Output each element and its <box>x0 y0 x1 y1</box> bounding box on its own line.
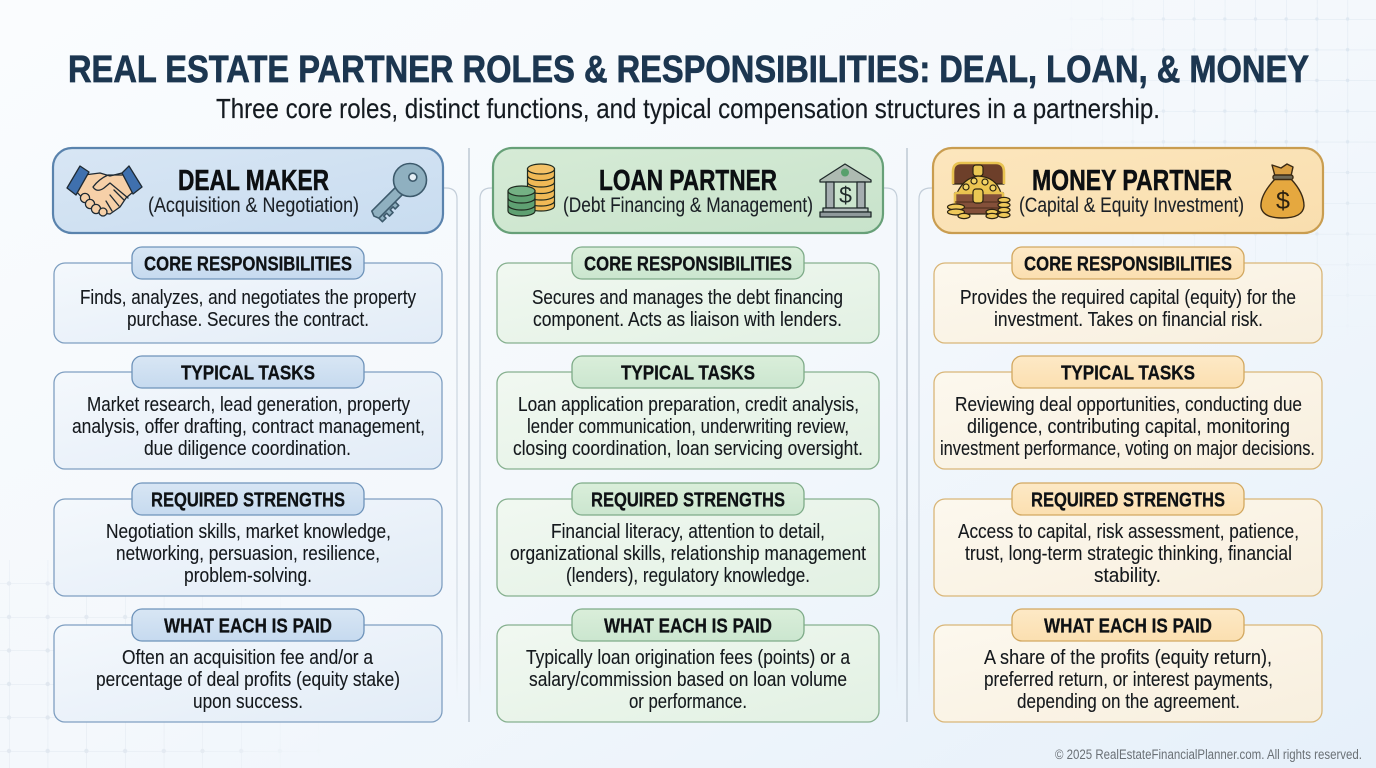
body text: Typically loan origination fees (points) or a <box>526 646 850 669</box>
body text: purchase. Secures the contract. <box>127 308 369 331</box>
body text: closing coordination, loan servicing oversight. <box>513 437 863 460</box>
pill label: CORE RESPONSIBILITIES <box>584 252 792 276</box>
card: core responsibilities <box>54 247 442 343</box>
card: core responsibilities <box>934 247 1322 343</box>
icon: treasure chest <box>948 163 1010 219</box>
card: what each is paid <box>497 609 879 722</box>
body text <box>984 646 1273 713</box>
card: core responsibilities <box>497 247 879 343</box>
body text: preferred return, or interest payments, <box>984 668 1273 691</box>
panel: money partner column <box>933 148 1323 722</box>
pill label: REQUIRED STRENGTHS <box>1031 488 1225 512</box>
subtitle: Three core roles, distinct functions, and typical compensation structures in a partnership. <box>216 93 1160 124</box>
card: required strengths <box>497 483 879 596</box>
body text: Access to capital, risk assessment, patience, <box>958 520 1299 543</box>
body text <box>72 393 425 460</box>
body text: Finds, analyzes, and negotiates the property <box>80 286 417 309</box>
panel: loan partner column <box>493 148 883 722</box>
heading: money partner: MONEY PARTNER <box>1032 165 1232 197</box>
body text: networking, persuasion, resilience, <box>116 542 380 565</box>
body text: depending on the agreement. <box>1017 690 1240 713</box>
body text: Negotiation skills, market knowledge, <box>106 520 391 543</box>
icon: handshake <box>67 166 142 216</box>
body text: stability. <box>1094 564 1161 587</box>
body text <box>80 286 417 331</box>
body text <box>106 520 391 587</box>
pill label: WHAT EACH IS PAID <box>1044 614 1212 638</box>
body text: Often an acquisition fee and/or a <box>122 646 374 669</box>
header: loan partner <box>493 148 883 233</box>
card: what each is paid <box>934 609 1322 722</box>
body text: percentage of deal profits (equity stake) <box>96 668 400 691</box>
icon: bank <box>820 164 871 217</box>
card: required strengths <box>934 483 1322 596</box>
body text: salary/commission based on loan volume <box>529 668 847 691</box>
body text: Loan application preparation, credit analysis, <box>518 393 859 416</box>
icon: money bag <box>1261 164 1304 218</box>
body text: Reviewing deal opportunities, conducting due <box>955 393 1302 416</box>
pill label <box>132 247 364 279</box>
body text: trust, long-term strategic thinking, financial <box>965 542 1292 565</box>
body text: Secures and manages the debt financing <box>532 286 843 309</box>
subheading: debt financing and management: (Debt Financing & Management) <box>563 193 813 217</box>
body text <box>960 286 1296 331</box>
pill label: TYPICAL TASKS <box>621 362 755 384</box>
body text: Market research, lead generation, property <box>87 393 411 416</box>
body text: diligence, contributing capital, monitoring <box>967 415 1290 438</box>
body text: A share of the profits (equity return), <box>984 646 1272 669</box>
body text: Financial literacy, attention to detail, <box>551 520 825 543</box>
body text <box>958 520 1299 587</box>
pill label <box>1012 247 1244 279</box>
body text: due diligence coordination. <box>144 437 351 460</box>
pill label <box>1012 609 1244 641</box>
dollar sign: $ <box>1276 187 1290 215</box>
panel: deal maker column <box>53 148 443 722</box>
pill label: REQUIRED STRENGTHS <box>591 488 785 512</box>
body text: Provides the required capital (equity) for the <box>960 286 1296 309</box>
card: what each is paid <box>54 609 442 722</box>
icon: coin stacks <box>508 164 554 216</box>
dollar sign: $ <box>839 182 852 208</box>
subheading: acquisition and negotiation: (Acquisition & Negotiation) <box>148 193 359 217</box>
pill label <box>572 247 804 279</box>
body text <box>526 646 850 713</box>
subheading: capital and equity investment: (Capital & Equity Investment) <box>1019 193 1244 217</box>
pill label: CORE RESPONSIBILITIES <box>1024 252 1232 276</box>
body text <box>96 646 400 713</box>
body text <box>513 393 863 460</box>
pill label <box>1012 356 1244 388</box>
body text: lender communication, underwriting review, <box>527 415 849 438</box>
pill label <box>572 483 804 515</box>
pill label: WHAT EACH IS PAID <box>604 614 772 638</box>
header: money partner <box>933 148 1323 233</box>
heading: deal maker: DEAL MAKER <box>178 165 329 197</box>
heading: loan partner: LOAN PARTNER <box>599 165 777 197</box>
body text: or performance. <box>629 690 747 713</box>
pill label: WHAT EACH IS PAID <box>164 614 332 638</box>
pill label <box>132 356 364 388</box>
body text <box>532 286 843 331</box>
card: required strengths <box>54 483 442 596</box>
pill label <box>572 609 804 641</box>
pill label: TYPICAL TASKS <box>1061 362 1195 384</box>
pill label: REQUIRED STRENGTHS <box>151 488 345 512</box>
pill label <box>572 356 804 388</box>
card: typical tasks <box>497 356 879 469</box>
body text: analysis, offer drafting, contract management, <box>72 415 425 438</box>
card: typical tasks <box>54 356 442 469</box>
header: deal maker <box>53 148 443 233</box>
pill label <box>132 483 364 515</box>
pill label <box>132 609 364 641</box>
body text <box>940 393 1315 460</box>
card: typical tasks <box>934 356 1322 469</box>
body text: upon success. <box>193 690 303 713</box>
body text: investment. Takes on financial risk. <box>994 308 1263 331</box>
body text: organizational skills, relationship management <box>510 542 866 565</box>
body text: component. Acts as liaison with lenders. <box>533 308 842 331</box>
pill label <box>1012 483 1244 515</box>
body text <box>510 520 866 587</box>
body text: problem-solving. <box>184 564 312 587</box>
pill label: CORE RESPONSIBILITIES <box>144 252 352 276</box>
body text: (lenders), regulatory knowledge. <box>566 564 810 587</box>
icon: key <box>362 157 433 228</box>
pill label: TYPICAL TASKS <box>181 362 315 384</box>
